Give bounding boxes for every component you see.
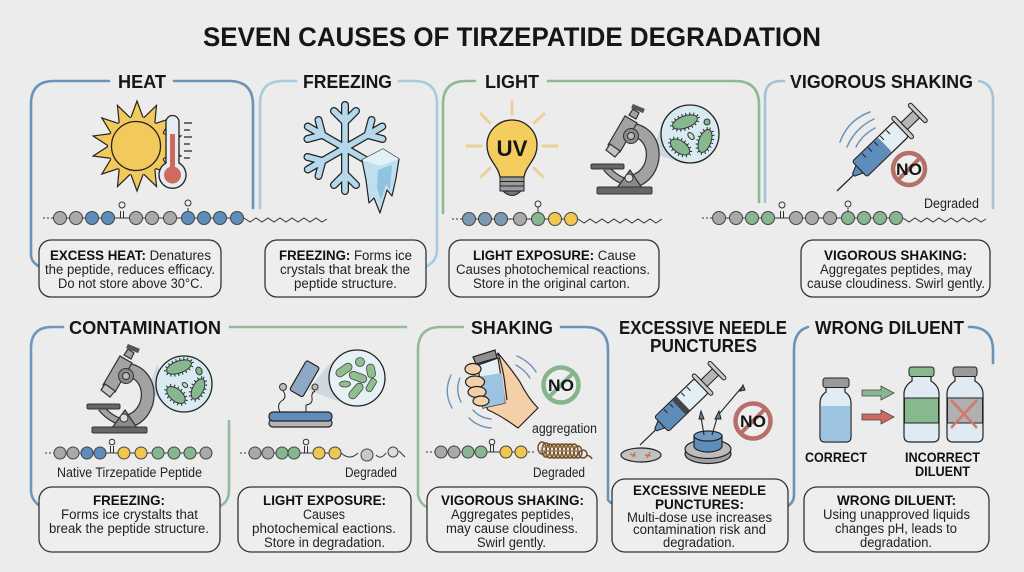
icon: no sign	[736, 404, 770, 438]
title: SEVEN CAUSES OF TIRZEPATIDE DEGRADATION	[203, 22, 821, 52]
callout: excessive needle punctures: PUNCTURES:	[655, 496, 744, 512]
icon: syringe	[827, 101, 930, 202]
heading: excessive needle punctures	[619, 318, 787, 356]
icon: crossed vial	[947, 367, 983, 442]
panel: light	[443, 72, 759, 297]
callout: excessive needle punctures	[612, 479, 788, 552]
icon: UV bulb	[467, 102, 557, 196]
panel: vigorous shaking	[702, 72, 993, 297]
callout: vigorous shaking: Swirl gently.	[477, 535, 546, 550]
icon: syringe	[630, 359, 728, 455]
callout: excessive needle punctures: EXCESSIVE NEEDLE	[633, 482, 766, 498]
icon: microscope	[591, 106, 682, 194]
callout: excess heat	[39, 240, 221, 297]
heading: contamination: CONTAMINATION	[69, 318, 221, 338]
label: incorrect diluent: INCORRECT	[905, 449, 980, 465]
callout: freezing	[265, 240, 426, 297]
callout: wrong diluent: Using unapproved liquids	[823, 507, 970, 522]
callout: excessive needle punctures: contamination risk and	[633, 522, 766, 537]
icon: no sign: NO	[896, 161, 922, 179]
icon: aggregated peptide coil	[538, 442, 592, 459]
icon: motion waves	[840, 112, 875, 147]
label: incorrect diluent	[905, 449, 980, 479]
icon: bacteria under lens	[156, 355, 212, 412]
icon: no sign	[544, 368, 578, 402]
icon: hand holding vial	[465, 350, 538, 428]
panel border: shaking right	[561, 327, 611, 503]
icon: no sign: NO	[548, 376, 574, 395]
callout: freezing: Forms ice crystalts that	[61, 507, 198, 522]
callout: freezing: FREEZING:	[93, 492, 165, 508]
peptide chain: shaking	[426, 439, 535, 458]
callout: vigorous shaking: Aggregates peptides, may	[820, 262, 972, 277]
callout: vigorous shaking: VIGOROUS SHAKING:	[824, 248, 967, 263]
peptide chain: vigorous shaking	[702, 201, 986, 224]
callout: light exposure: Store in the original carton.	[473, 276, 630, 291]
peptide chain: native	[45, 439, 212, 459]
callout: light exposure: Causes	[303, 507, 345, 522]
panel border: contamination	[31, 327, 63, 506]
callout: vigorous shaking: Aggregates peptides,	[451, 507, 574, 522]
callout: wrong diluent: degradation.	[860, 535, 932, 550]
callout: freezing	[39, 487, 220, 552]
icon: thermometer	[159, 116, 192, 188]
callout: vigorous shaking: cause cloudiness. Swirl gently.	[807, 276, 985, 291]
icon: snowflake	[302, 105, 388, 191]
callout: wrong diluent: changes pH, leads to	[835, 521, 957, 536]
panel border: freezing	[260, 81, 437, 266]
label: native peptide: Native Tirzepatide Peptide	[57, 465, 202, 480]
panel border: heat	[31, 81, 253, 267]
icon: UV bulb: UV	[496, 136, 528, 161]
heading: freezing: FREEZING	[303, 72, 392, 92]
callout: light exposure: photochemical eactions.	[252, 521, 396, 536]
callout: freezing: break the peptide structure.	[49, 521, 209, 536]
label: degraded: Degraded	[533, 465, 585, 480]
callout: freezing: FREEZING: Forms ice	[279, 248, 412, 263]
panel border: vigorous shaking	[765, 81, 993, 208]
panel: contamination	[31, 318, 411, 552]
callout: wrong diluent	[804, 487, 989, 552]
icon: green label vial	[904, 367, 939, 442]
callout: excessive needle punctures: degradation.	[663, 535, 735, 550]
icon: motion waves	[447, 356, 536, 428]
icon: rods under lens	[329, 350, 385, 406]
callout: light exposure: LIGHT EXPOSURE:	[263, 492, 386, 508]
icon: petri dish	[621, 448, 661, 462]
callout: light exposure: Causes photochemical reactions.	[456, 262, 650, 277]
heading: light: LIGHT	[485, 72, 539, 92]
callout: vigorous shaking	[427, 487, 597, 552]
callout: vigorous shaking: VIGOROUS SHAKING:	[441, 492, 584, 508]
label: degraded: Degraded	[924, 196, 979, 211]
panel: freezing	[260, 72, 437, 297]
panel border: shaking left	[418, 327, 463, 507]
label: aggregation: aggregation	[532, 421, 597, 436]
icon: ice block	[362, 149, 399, 213]
callout: freezing: crystals that break the	[280, 262, 410, 277]
callout: excessive needle punctures: Multi-dose use increases	[627, 510, 772, 525]
arrow: green	[862, 386, 894, 400]
icon: bacteria under lens	[661, 105, 719, 163]
callout: vigorous shaking: may cause cloudiness.	[446, 521, 578, 536]
icon: sun	[92, 101, 182, 191]
panel: shaking	[418, 318, 611, 552]
panel border: light	[443, 81, 759, 213]
callout: light exposure: LIGHT EXPOSURE: Cause	[473, 248, 636, 263]
peptide chain: heat	[43, 200, 327, 224]
panel: wrong diluent	[804, 318, 993, 552]
icon: vial over tray	[269, 360, 343, 427]
heading: excessive needle punctures: PUNCTURES	[650, 336, 757, 356]
panel: heat	[31, 72, 327, 297]
panel border: needle right	[788, 327, 808, 506]
icon: microscope	[87, 346, 177, 433]
callout: light exposure	[449, 240, 659, 297]
heading: vigorous shaking: VIGOROUS SHAKING	[790, 72, 973, 92]
callout: freezing: peptide structure.	[294, 276, 397, 291]
panel border: contamination right	[220, 327, 406, 506]
callout: excess heat: EXCESS HEAT: Denatures	[50, 248, 211, 263]
heading: excessive needle punctures: EXCESSIVE NEEDLE	[619, 318, 787, 338]
label: degraded: Degraded	[345, 465, 397, 480]
callout: wrong diluent: WRONG DILUENT:	[837, 492, 956, 508]
arrow: red	[862, 410, 894, 424]
peptide chain: light	[452, 201, 662, 226]
icon: vial stopper with needles	[685, 385, 745, 464]
icon: no sign: NO	[740, 412, 766, 431]
callout: excess heat: the peptide, reduces efficacy.	[45, 262, 215, 277]
panel: excessive needle punctures	[612, 318, 808, 552]
heading: heat: HEAT	[118, 72, 166, 92]
heading: wrong diluent: WRONG DILUENT	[815, 318, 964, 338]
callout: light exposure: Store in degradation.	[264, 535, 385, 550]
peptide chain: degraded	[240, 439, 405, 461]
panel border: wrong diluent	[969, 327, 993, 363]
label: correct: CORRECT	[805, 449, 867, 465]
callout: vigorous shaking	[801, 240, 990, 297]
heading: shaking: SHAKING	[471, 318, 553, 338]
icon: no sign	[893, 153, 925, 185]
callout: excess heat: Do not store above 30°C.	[58, 276, 203, 291]
icon: correct vial	[820, 378, 851, 442]
callout: light exposure	[238, 487, 411, 552]
label: incorrect diluent: DILUENT	[915, 463, 970, 479]
